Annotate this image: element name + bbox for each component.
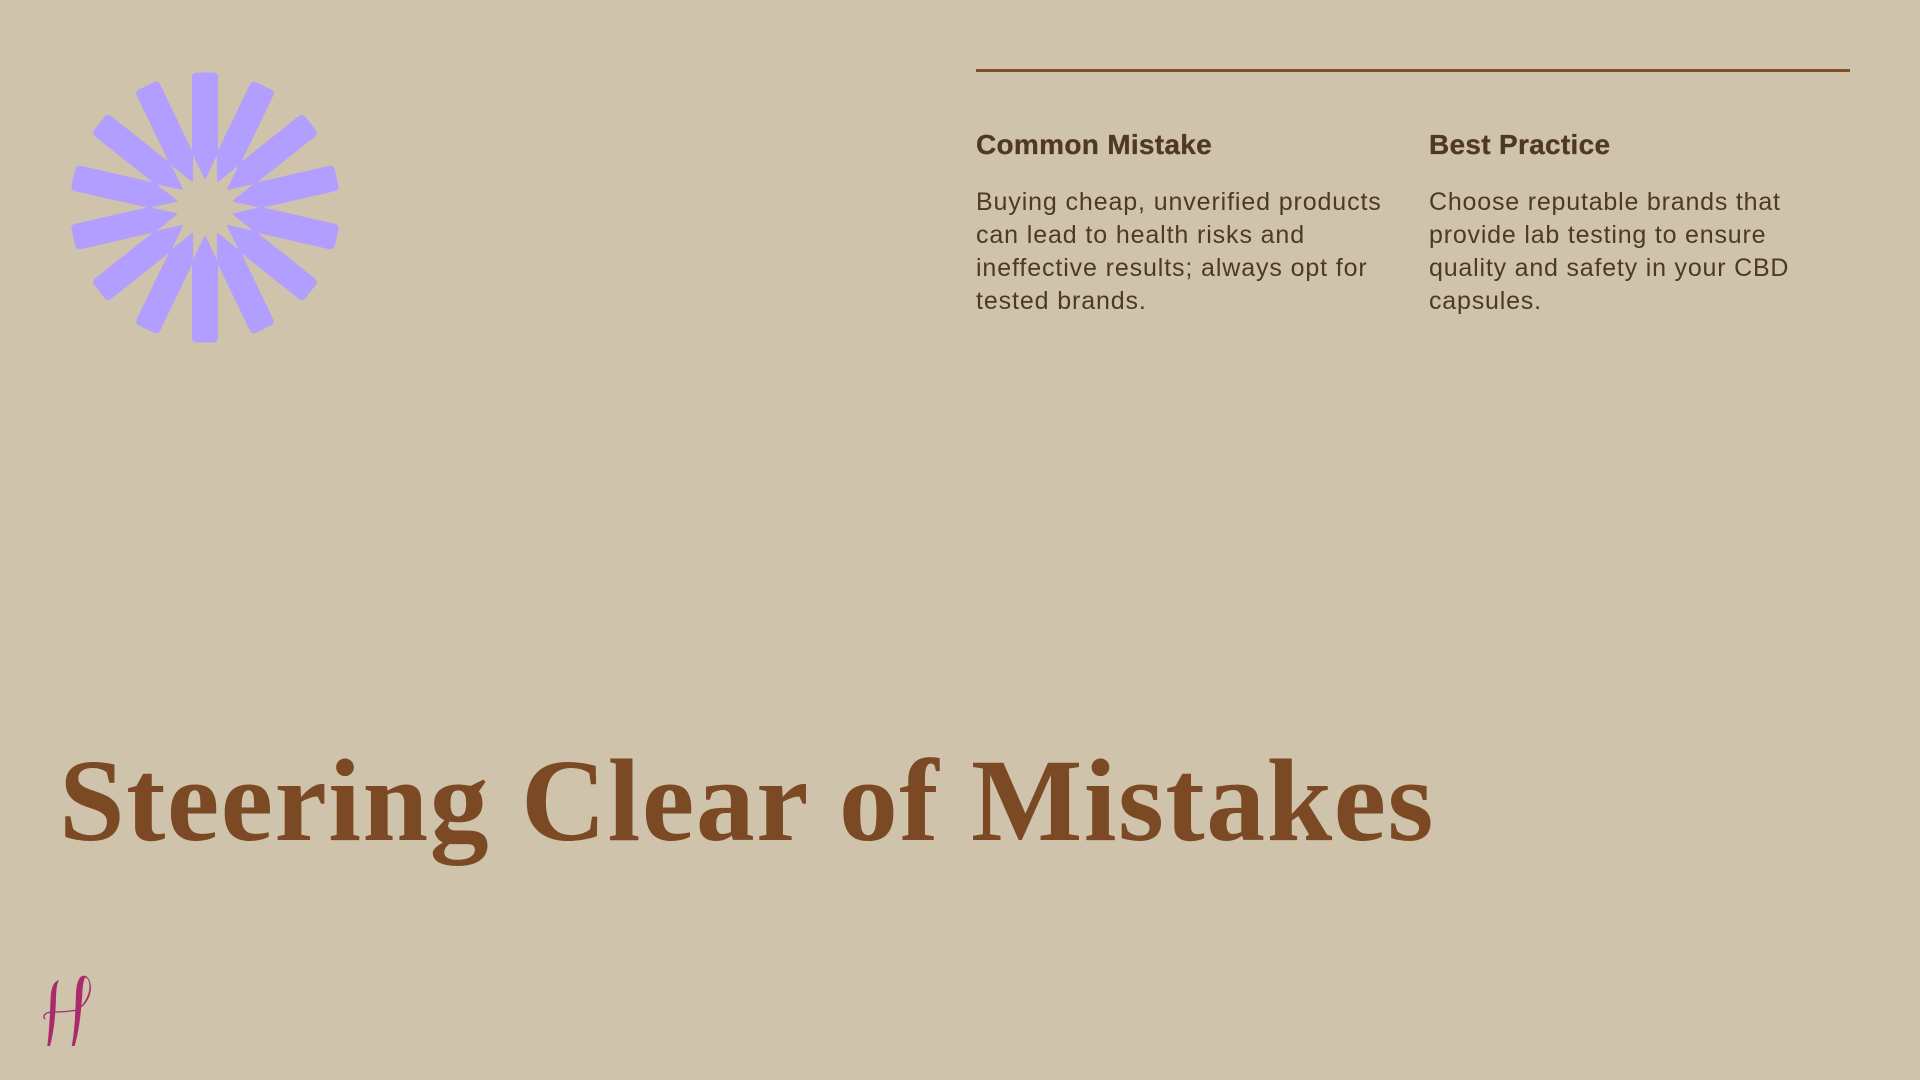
text: common mistake body: ineffective results; always opt for	[976, 254, 1368, 282]
divider rule	[976, 68, 1850, 72]
text: best practice body: quality and safety in your CBD	[1429, 254, 1789, 282]
panel: common mistake	[976, 129, 1382, 315]
heading: best practice: Best Practice	[1429, 129, 1610, 160]
text: common mistake body: tested brands.	[976, 287, 1147, 315]
text: best practice body: provide lab testing to ensure	[1429, 221, 1766, 249]
title: Steering Clear of Mistakes	[59, 735, 1435, 866]
heading: common mistake: Common Mistake	[976, 129, 1212, 160]
text: best practice body	[1429, 188, 1789, 315]
text: common mistake body	[976, 188, 1382, 315]
panel: best practice	[1429, 129, 1789, 315]
text: best practice body: Choose reputable brands that	[1429, 188, 1781, 216]
text: common mistake body: can lead to health risks and	[976, 221, 1305, 249]
icon: script H logo	[43, 976, 91, 1046]
icon: purple starburst	[71, 72, 339, 342]
text: best practice body: capsules.	[1429, 287, 1542, 315]
text: common mistake body: Buying cheap, unverified products	[976, 188, 1382, 216]
